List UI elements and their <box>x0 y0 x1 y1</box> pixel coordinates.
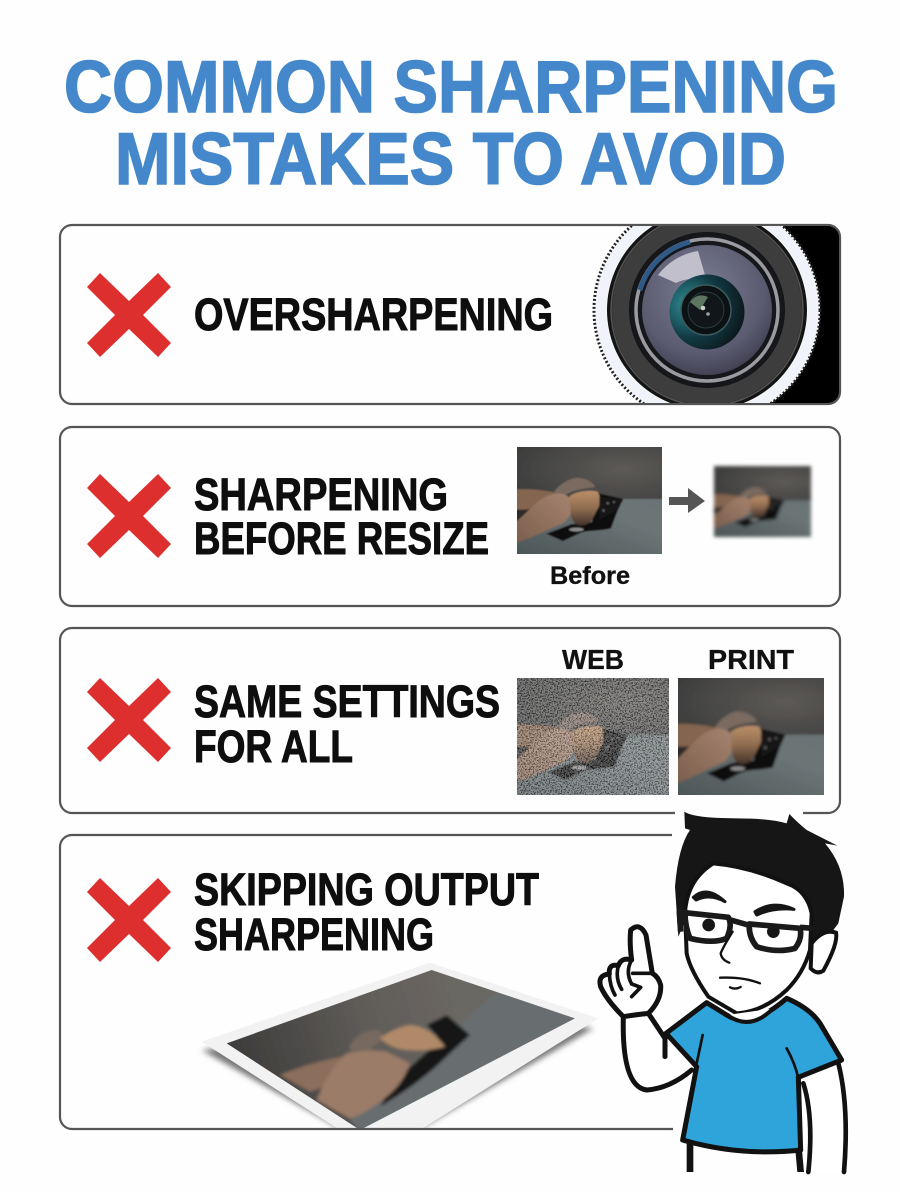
character pointing finger <box>600 812 846 1172</box>
icon: red cross <box>87 678 171 762</box>
title: MISTAKES TO AVOID <box>115 119 786 200</box>
camera lens image <box>592 226 839 403</box>
icon: red cross <box>87 878 171 962</box>
label: oversharpening: OVERSHARPENING <box>194 289 553 340</box>
label: same settings for all <box>194 676 500 772</box>
character: neck collar <box>727 1008 773 1022</box>
resized blurry photo <box>714 466 811 537</box>
label: sharpening before resize: BEFORE RESIZE <box>194 513 489 564</box>
caption: web: WEB <box>562 644 624 675</box>
caption: print: PRINT <box>708 644 794 675</box>
label: same settings for all: FOR ALL <box>194 721 353 772</box>
character: glasses <box>679 912 813 950</box>
caption: before: Before <box>550 562 630 590</box>
title: COMMON SHARPENING <box>64 47 838 128</box>
title <box>64 47 838 200</box>
panel: oversharpening <box>58 224 842 406</box>
character: shirt folds <box>697 1035 798 1078</box>
character: eyes <box>702 919 780 938</box>
icon: red cross <box>87 474 171 558</box>
label: sharpening before resize: SHARPENING <box>194 469 448 520</box>
character: raised arm and hand <box>600 927 692 1090</box>
character: brows <box>693 892 794 915</box>
label: skipping output sharpening: SKIPPING OUTPUT <box>194 864 539 915</box>
tilted print with shadow <box>202 963 598 1137</box>
before photo <box>514 444 665 557</box>
label: skipping output sharpening <box>194 864 539 960</box>
panel outline: open on the right behind the character <box>60 835 673 1129</box>
panel: skipping output sharpening <box>60 835 673 1137</box>
character: face <box>685 863 812 1013</box>
character: nose and mouth <box>720 932 760 989</box>
label: skipping output sharpening: SHARPENING <box>194 909 434 960</box>
panel: same settings for all <box>60 628 840 813</box>
icon: red cross <box>87 273 171 357</box>
character: far arm and legs <box>687 1063 846 1172</box>
character: blue t-shirt <box>666 998 842 1152</box>
character: ear <box>811 932 836 972</box>
noisy web photo <box>515 676 671 797</box>
print photo <box>678 678 824 795</box>
label: same settings for all: SAME SETTINGS <box>194 676 500 727</box>
label: sharpening before resize <box>194 469 489 564</box>
arrow <box>669 488 705 513</box>
panel: sharpening before resize <box>60 427 840 606</box>
character: hair <box>675 812 844 957</box>
